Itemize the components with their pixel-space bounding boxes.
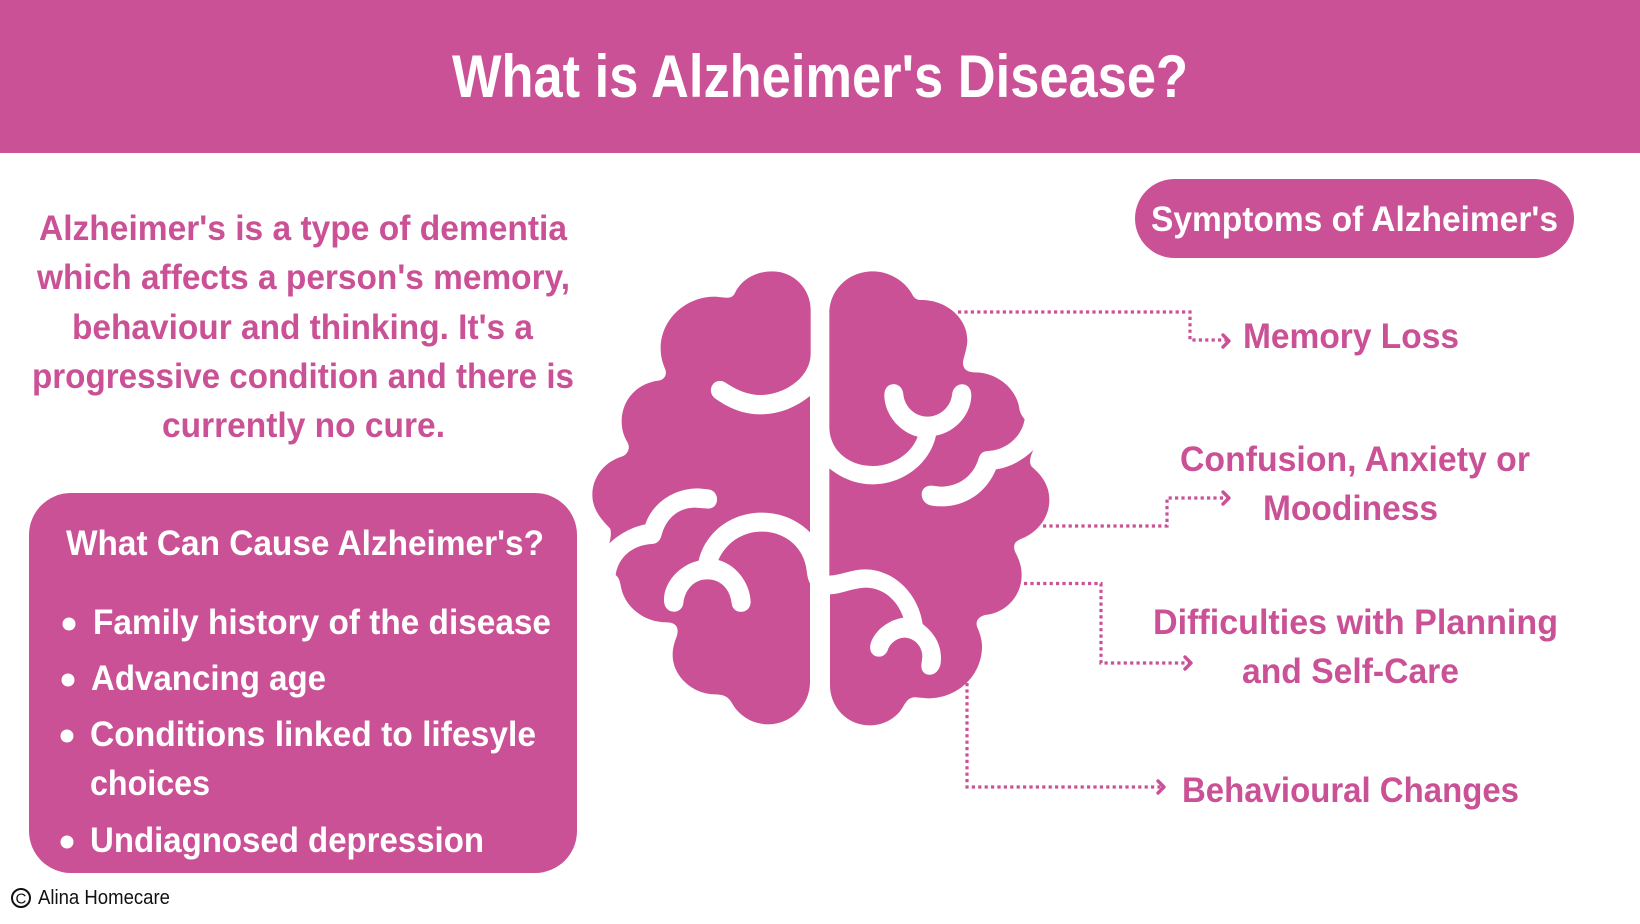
intro paragraph: behaviour and thinking. It's a	[72, 308, 534, 347]
cause: undiagnosed depression: Undiagnosed depression	[90, 821, 484, 860]
header band	[0, 0, 1640, 153]
brain left hemisphere	[592, 271, 811, 724]
arrow: confusion	[1043, 492, 1229, 526]
cause: family history: Family history of the disease	[93, 603, 551, 642]
intro paragraph: which affects a person's memory,	[36, 258, 570, 297]
symptom: memory loss: Memory Loss	[1243, 317, 1459, 356]
intro paragraph	[32, 209, 574, 445]
causes heading: What Can Cause Alzheimer's?	[66, 524, 544, 563]
intro paragraph: Alzheimer's is a type of dementia	[39, 209, 568, 248]
copyright credit: Alina Homecare	[38, 887, 170, 909]
symptom: confusion: Moodiness	[1263, 489, 1438, 528]
symptom: confusion	[1180, 440, 1530, 528]
symptoms heading pill	[1135, 179, 1574, 258]
cause: lifestyle conditions: choices	[90, 764, 210, 803]
cause: lifestyle conditions	[60, 715, 536, 803]
intro paragraph: progressive condition and there is	[32, 357, 574, 396]
connector lines	[958, 312, 1229, 793]
symptom: confusion: Confusion, Anxiety or	[1180, 440, 1530, 479]
symptom: behaviour: Behavioural Changes	[1182, 771, 1519, 810]
symptom: planning: and Self-Care	[1242, 652, 1459, 691]
panel: causes	[29, 493, 577, 873]
arrow: planning	[1024, 584, 1191, 669]
cause: advancing age: Advancing age	[91, 659, 326, 698]
icon: brain	[592, 271, 1049, 725]
symptom: planning	[1153, 603, 1558, 691]
copyright credit: C	[16, 890, 26, 908]
symptoms heading pill: Symptoms of Alzheimer's	[1151, 200, 1558, 239]
arrow: memory loss	[958, 312, 1229, 347]
arrow: behaviour	[967, 683, 1164, 793]
symptom: planning: Difficulties with Planning	[1153, 603, 1558, 642]
cause: lifestyle conditions: Conditions linked to lifesyle	[90, 715, 536, 754]
brain right hemisphere	[829, 271, 1049, 725]
title: What is Alzheimer's Disease?	[452, 43, 1188, 110]
intro paragraph: currently no cure.	[162, 406, 445, 445]
